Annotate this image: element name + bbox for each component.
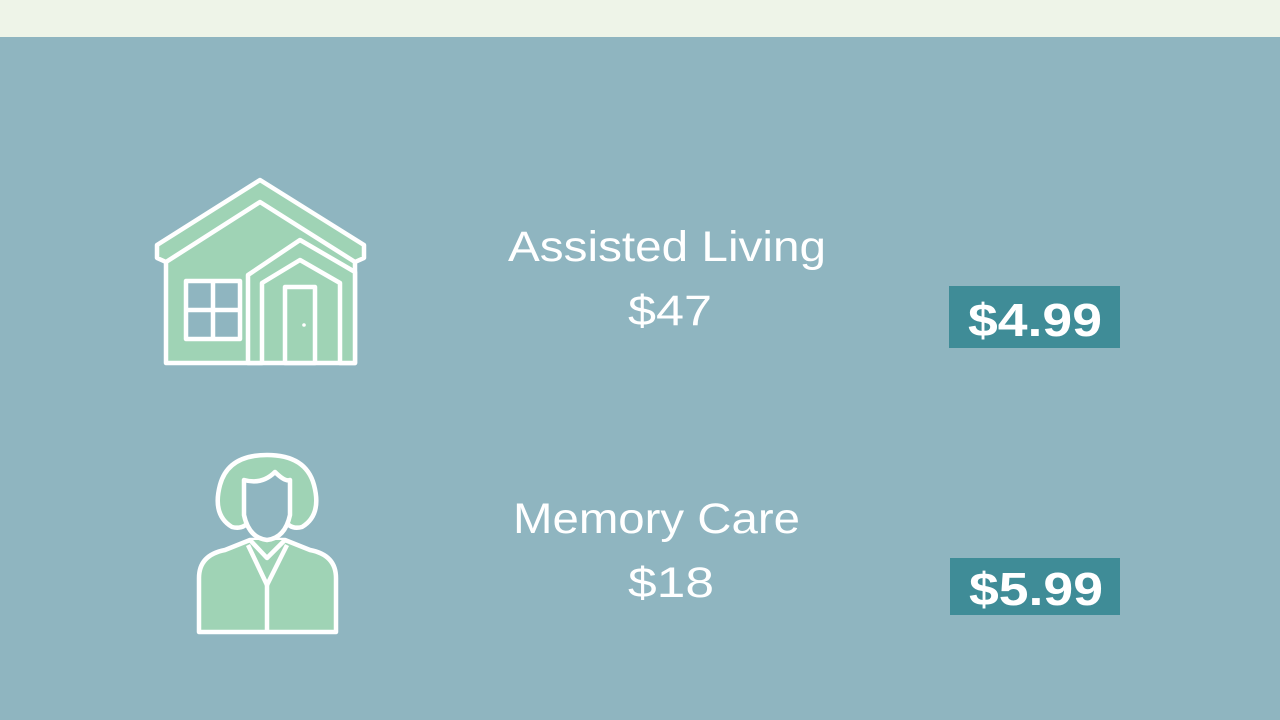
badge: $5.99 (950, 558, 1120, 615)
badge: $5.99: $5.99 (969, 563, 1103, 615)
text: memory care (513, 495, 800, 607)
icon: person (199, 455, 336, 632)
text: assisted living (508, 223, 826, 335)
icon: house (157, 180, 364, 363)
text: memory care: Memory Care (513, 495, 800, 543)
text: assisted living: Assisted Living (508, 223, 826, 271)
text: memory care: $18 (628, 559, 714, 607)
badge: $4.99: $4.99 (968, 294, 1102, 346)
top banner (0, 0, 1280, 37)
badge: $4.99 (949, 286, 1120, 348)
text: assisted living: $47 (628, 287, 712, 335)
